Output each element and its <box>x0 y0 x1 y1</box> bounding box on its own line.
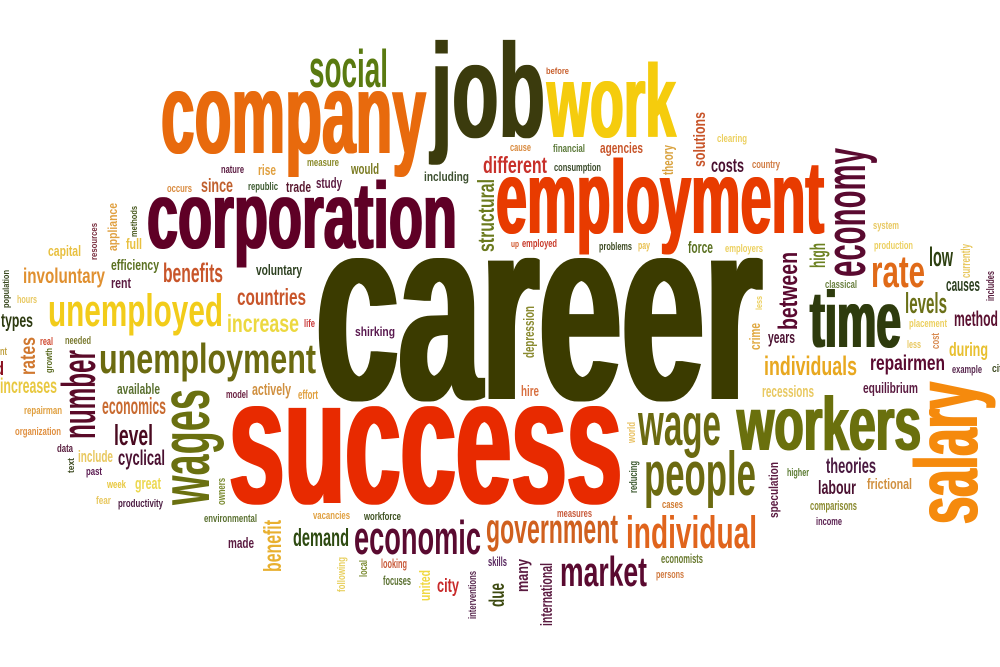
word: needed: needed <box>65 335 91 347</box>
word: world: world <box>626 422 638 444</box>
word: problems: problems <box>599 241 632 253</box>
word: resources: resources <box>89 223 100 260</box>
word: measure: measure <box>307 157 339 169</box>
word: government: government <box>486 505 618 552</box>
word: vacancies: vacancies <box>313 510 350 522</box>
word: rates: rates <box>17 337 40 375</box>
word: past: past <box>86 466 102 478</box>
word: repairman: repairman <box>24 405 62 417</box>
word: workforce: workforce <box>363 511 401 523</box>
word: environmental: environmental <box>204 513 257 525</box>
word: individuals: individuals <box>764 351 857 381</box>
word: reducing: reducing <box>628 461 640 493</box>
word: work: work <box>546 44 676 160</box>
word: clearing: clearing <box>717 133 747 145</box>
word: unemployed: unemployed <box>48 285 223 336</box>
word: occurs: occurs <box>167 183 192 195</box>
word: placement: placement <box>909 318 947 330</box>
word: types: types <box>1 311 33 332</box>
word: comparisons: comparisons <box>810 498 857 513</box>
word: repairmen: repairmen <box>870 352 945 375</box>
word: productivity: productivity <box>118 498 163 510</box>
word: involuntary: involuntary <box>23 265 105 288</box>
word: full: full <box>126 236 142 253</box>
word: increases: increases <box>0 375 57 398</box>
word: economists: economists <box>661 551 703 566</box>
word: effort: effort <box>298 387 318 402</box>
word: economics: economics <box>102 393 166 419</box>
word: following: following <box>336 557 348 592</box>
word: interventions: interventions <box>467 571 479 619</box>
word: high: high <box>807 243 830 268</box>
word: theories: theories <box>826 455 876 478</box>
word: financial: financial <box>553 143 585 155</box>
word: years: years <box>768 328 795 347</box>
word: salary: salary <box>896 382 996 524</box>
word: force: force <box>688 238 713 257</box>
word: country: country <box>752 159 780 171</box>
word: frictional: frictional <box>867 476 912 493</box>
word: less: less <box>907 339 921 351</box>
word: demand: demand <box>293 524 349 552</box>
word: available: available <box>117 381 160 398</box>
word: week: week <box>106 479 126 491</box>
word: production: production <box>874 240 913 252</box>
word: rise: rise <box>258 162 276 179</box>
word: local: local <box>358 560 370 577</box>
word: classical: classical <box>825 279 857 291</box>
word: capital: capital <box>48 243 81 260</box>
word: cyclical: cyclical <box>118 447 165 470</box>
word: methods: methods <box>129 206 140 237</box>
word: life: life <box>304 318 315 330</box>
word: costs: costs <box>711 156 744 177</box>
word: rent: rent <box>111 275 131 292</box>
word: low: low <box>929 242 953 272</box>
word: individual: individual <box>626 507 757 558</box>
word: depression: depression <box>521 306 538 358</box>
word: focuses: focuses <box>383 573 411 588</box>
word: includes: includes <box>985 271 997 301</box>
word: city: city <box>437 576 459 597</box>
word: since: since <box>201 176 233 197</box>
word: include: include <box>78 447 113 466</box>
word: market: market <box>560 548 647 595</box>
word: many: many <box>513 559 532 592</box>
word: job: job <box>429 17 545 166</box>
word: international: international <box>537 563 556 626</box>
word: system: system <box>873 220 899 232</box>
word: great: great <box>135 474 161 493</box>
word: equilibrium: equilibrium <box>863 380 918 397</box>
word: time: time <box>810 275 901 364</box>
word: success: success <box>229 341 622 542</box>
word: nature: nature <box>221 164 244 176</box>
word: benefits: benefits <box>163 258 223 288</box>
word: levels: levels <box>905 288 947 320</box>
word: voluntary: voluntary <box>256 262 302 279</box>
word: crime: crime <box>747 323 764 350</box>
word: trade: trade <box>286 179 311 196</box>
word: theory: theory <box>660 145 677 175</box>
word: cost: cost <box>930 333 942 349</box>
word: appliance: appliance <box>105 203 120 251</box>
word: benefit: benefit <box>259 520 287 572</box>
word: employed: employed <box>522 238 557 250</box>
word: fear: fear <box>96 495 111 507</box>
word: before: before <box>546 66 569 77</box>
word: growth: growth <box>44 348 55 373</box>
word: hours: hours <box>17 294 37 306</box>
word: made: made <box>228 535 254 552</box>
word: less: less <box>754 296 765 310</box>
word: economic: economic <box>354 512 481 565</box>
word: example: example <box>952 364 982 376</box>
word: structural: structural <box>473 179 499 252</box>
word: data: data <box>57 443 73 455</box>
word: organization: organization <box>15 426 61 438</box>
word: efficiency: efficiency <box>111 257 159 274</box>
word: measures: measures <box>557 508 592 520</box>
word: countries: countries <box>237 284 306 310</box>
word: consumption: consumption <box>554 162 601 174</box>
word: shirking: shirking <box>355 324 395 339</box>
word: economy: economy <box>814 148 878 277</box>
word: would: would <box>350 161 379 178</box>
word: company: company <box>161 49 426 178</box>
word: hire: hire <box>521 383 539 400</box>
word: different: different <box>483 152 547 178</box>
word: owners: owners <box>216 478 228 505</box>
word: actively: actively <box>252 380 291 399</box>
word: including: including <box>424 169 469 184</box>
word: recessions: recessions <box>762 382 814 401</box>
word: people: people <box>644 439 756 509</box>
word: corporation: corporation <box>147 163 457 269</box>
word: cases: cases <box>662 499 683 511</box>
word: between: between <box>773 252 803 330</box>
word: cause: cause <box>510 142 531 154</box>
word: level: level <box>114 420 153 452</box>
word: unemployment: unemployment <box>99 335 316 382</box>
word: income: income <box>816 516 842 528</box>
word: model: model <box>226 389 248 401</box>
word: real: real <box>40 336 53 348</box>
word: wage: wage <box>637 390 721 458</box>
word: text: text <box>66 457 77 473</box>
word: currently: currently <box>958 244 973 278</box>
word: increase: increase <box>227 310 299 338</box>
word: population: population <box>1 270 12 308</box>
word fragment: nt: nt <box>0 346 7 358</box>
word: solutions: solutions <box>690 112 709 167</box>
word: wages: wages <box>146 389 224 506</box>
word: republic: republic <box>248 181 278 193</box>
word: skills: skills <box>488 554 507 569</box>
word: social: social <box>309 40 388 99</box>
word: study: study <box>316 175 342 192</box>
word: due: due <box>486 583 509 607</box>
word: employers: employers <box>725 243 763 255</box>
word: number: number <box>53 350 106 439</box>
word: up: up <box>511 239 519 250</box>
word: higher: higher <box>787 467 809 479</box>
word: looking: looking <box>381 556 407 571</box>
word: rate: rate <box>871 246 925 297</box>
word: speculation: speculation <box>766 462 781 518</box>
word: united: united <box>417 570 434 601</box>
word: pay: pay <box>638 240 650 252</box>
word: agencies: agencies <box>600 140 643 157</box>
word: persons: persons <box>656 569 684 581</box>
word: labour: labour <box>818 478 856 499</box>
